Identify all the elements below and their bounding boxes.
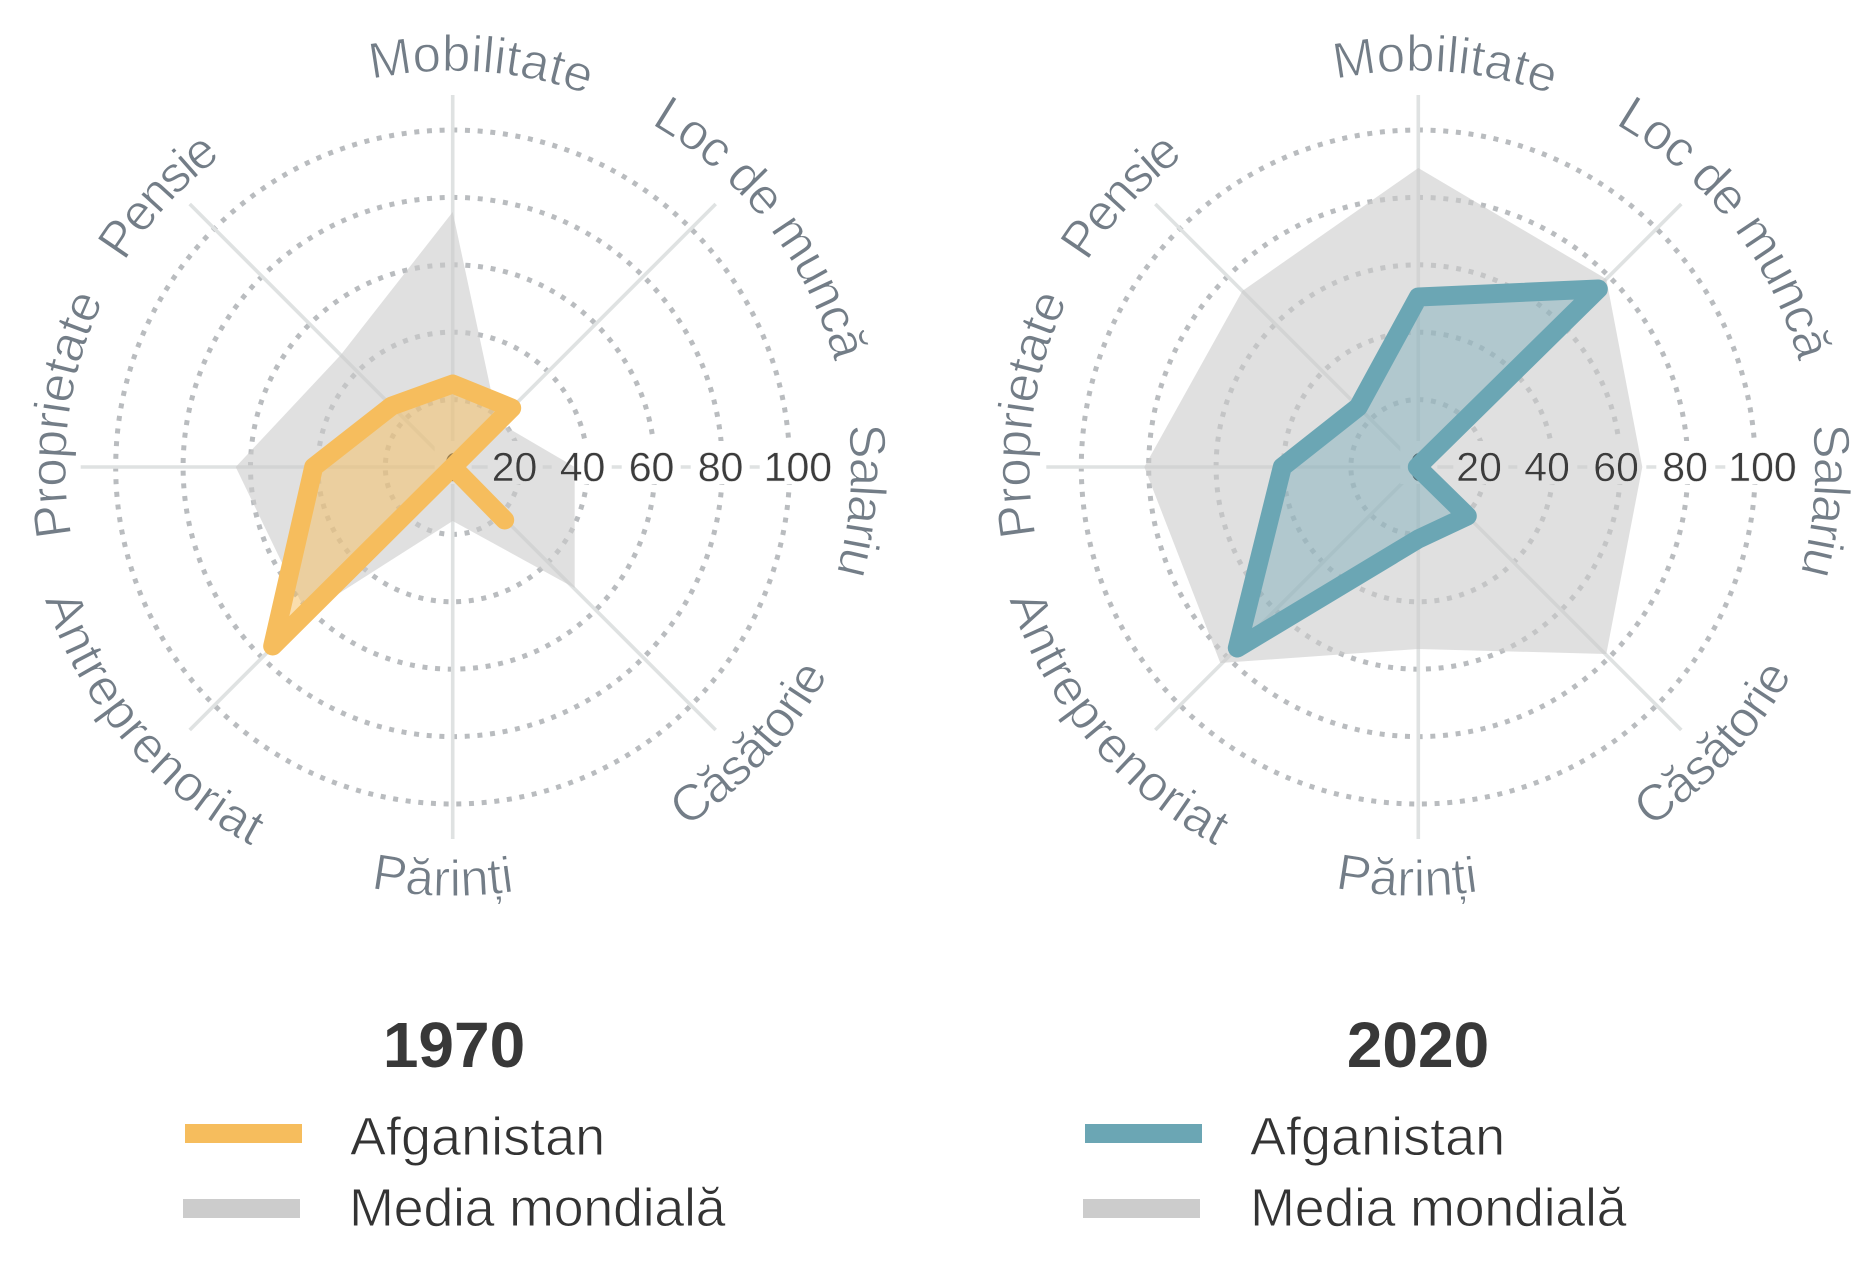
axis label: Salariu: Salariu <box>1802 428 1851 576</box>
legend: 2020 <box>1083 1107 1628 1238</box>
scale labels 0 to 100: 20 <box>492 444 537 490</box>
scale labels 0 to 100: 100 <box>1728 444 1797 490</box>
legend text: Media mondială: Media mondială <box>1250 1178 1628 1238</box>
scale labels 0 to 100: 40 <box>560 444 605 490</box>
legend text: Media mondială: Media mondială <box>349 1178 727 1238</box>
area and outline: Afghanistan 2020 <box>1237 289 1598 648</box>
scale labels 0 to 100: 40 <box>1524 444 1570 490</box>
scale labels 0 to 100 <box>1409 444 1797 490</box>
scale labels 0 to 100: 60 <box>629 444 674 490</box>
legend: 1970 <box>183 1107 727 1238</box>
heading: 2020: 2020 <box>1347 1009 1489 1081</box>
legend swatch: Afghanistan orange <box>185 1124 302 1143</box>
heading: 1970: 1970 <box>383 1009 525 1081</box>
axis label: Părinți: Părinți <box>1339 854 1475 904</box>
legend text: Afganistan: Afganistan <box>1250 1107 1505 1167</box>
axis label: Antreprenoriat: Antreprenoriat <box>1010 600 1228 846</box>
axis label: Proprietate: Proprietate <box>998 295 1064 536</box>
scale labels 0 to 100: 100 <box>764 444 832 490</box>
radar chart: 1970 <box>34 34 887 904</box>
scale labels 0 to 100: 80 <box>1662 444 1708 490</box>
axis label: Pensie: Pensie <box>1060 142 1178 258</box>
axis label: Părinți: Părinți <box>375 854 511 904</box>
axis label: Mobilitate: Mobilitate <box>370 34 590 91</box>
area: world average 2020 <box>1144 168 1642 663</box>
scale labels 0 to 100: 20 <box>1456 444 1502 490</box>
axis label: Proprietate: Proprietate <box>34 295 100 536</box>
scale labels 0 to 100: 0 <box>1409 444 1432 490</box>
axis label: Salariu: Salariu <box>838 428 887 576</box>
legend text: Afganistan: Afganistan <box>350 1107 605 1167</box>
scale labels 0 to 100 <box>444 444 832 490</box>
axis label: Antreprenoriat: Antreprenoriat <box>45 600 264 846</box>
axis label: Pensie: Pensie <box>98 142 216 258</box>
area and outline: Afghanistan 1970 <box>273 384 512 646</box>
legend swatch: world average grey <box>1083 1199 1200 1218</box>
axis label: Loc de muncă: Loc de muncă <box>655 97 868 362</box>
legend swatch: world average grey <box>183 1199 300 1218</box>
scale labels 0 to 100: 80 <box>698 444 743 490</box>
axis label: Mobilitate: Mobilitate <box>1335 34 1554 91</box>
legend swatch: Afghanistan teal <box>1085 1124 1202 1143</box>
axis label: Căsătorie: Căsătorie <box>674 667 824 820</box>
area: world average 1970 <box>236 212 575 614</box>
scale labels 0 to 100: 0 <box>444 444 467 490</box>
scale labels 0 to 100: 60 <box>1593 444 1639 490</box>
axis label: Căsătorie: Căsătorie <box>1638 667 1788 820</box>
axis label: Loc de muncă: Loc de muncă <box>1619 97 1832 362</box>
radar chart: 2020 <box>998 34 1851 904</box>
